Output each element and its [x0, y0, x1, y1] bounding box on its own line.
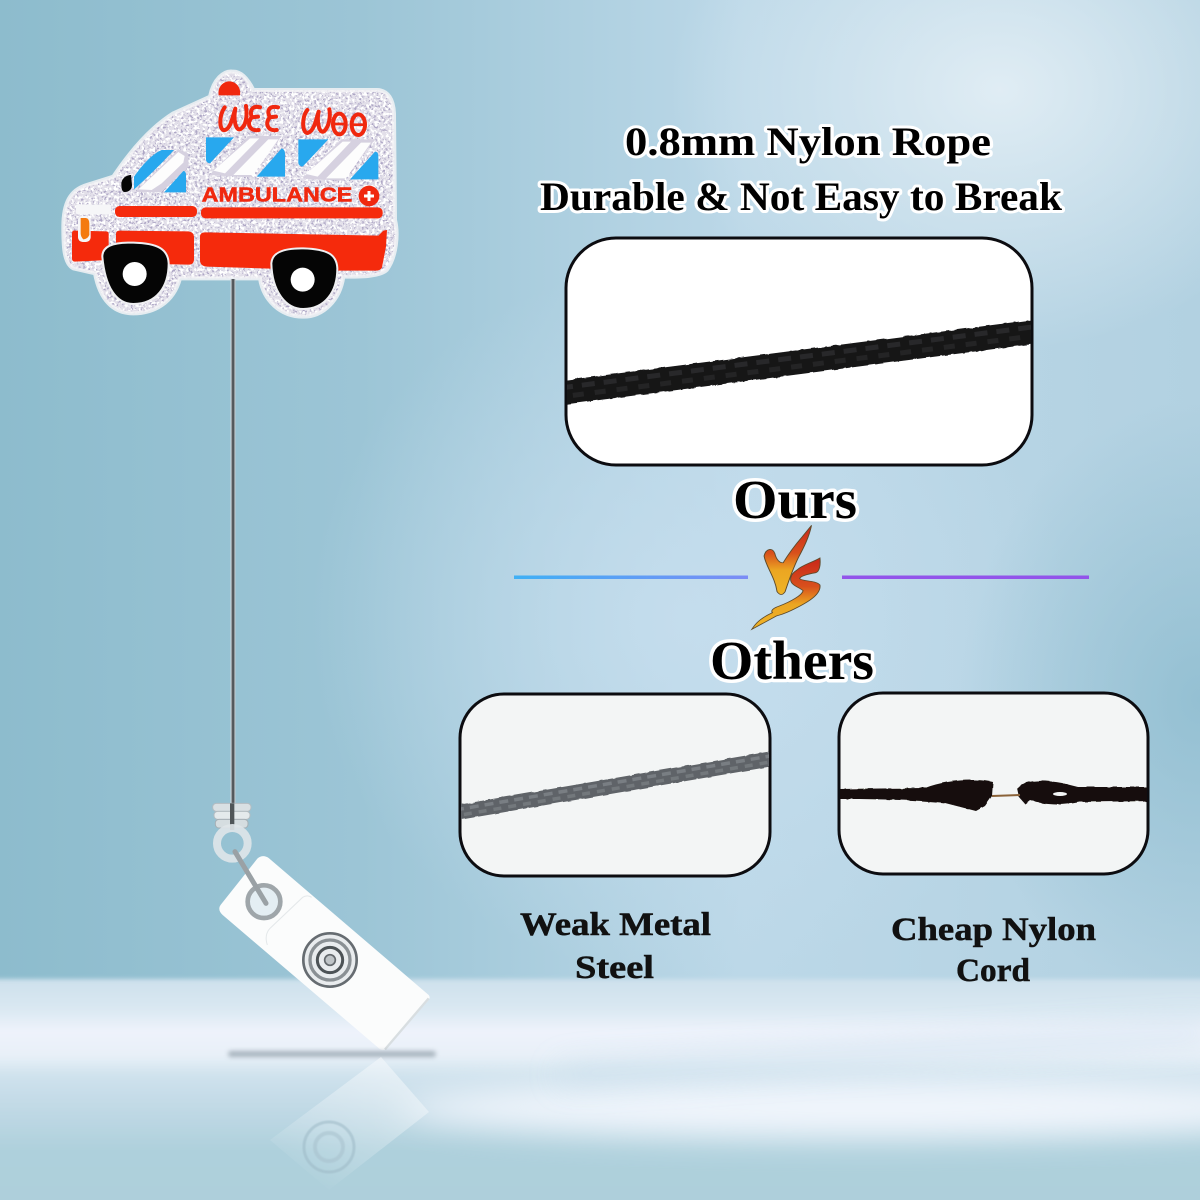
- ours label: Ours: [733, 469, 857, 530]
- panel: our nylon rope: [560, 238, 1040, 465]
- panel: weak metal steel: [455, 694, 776, 876]
- headline: 0.8mm Nylon Rope: [625, 119, 991, 164]
- blue glass: [134, 137, 378, 192]
- panel: cheap nylon cord: [835, 693, 1152, 874]
- white clip: [219, 856, 430, 1050]
- red stripes and body panels: [72, 206, 387, 271]
- headline: Durable & Not Easy to Break: [540, 174, 1063, 219]
- badge clip assembly: [213, 803, 430, 1050]
- caption: weak metal steel: Weak Metal: [520, 907, 711, 943]
- headline: [540, 119, 1063, 219]
- retractable pin: [230, 279, 236, 807]
- caption: weak metal steel: Steel: [575, 950, 654, 986]
- wee woo lettering: [220, 106, 365, 135]
- braided black rope: [560, 326, 1040, 397]
- ground shadow: [228, 1051, 436, 1057]
- threaded bead: [213, 803, 251, 830]
- caption: cheap nylon cord: [891, 912, 1096, 989]
- ambulance badge charm: [60, 68, 400, 318]
- caption: cheap nylon cord: Cord: [956, 953, 1030, 989]
- orange indicator: [78, 216, 91, 242]
- siren light: [218, 81, 240, 95]
- side mirror: [121, 175, 132, 192]
- grey rope: [455, 755, 776, 816]
- vs flame emblem: [752, 525, 820, 629]
- divider right: [842, 576, 1089, 579]
- caption: cheap nylon cord: Cheap Nylon: [891, 912, 1096, 948]
- ambulance label: AMBULANCE: [202, 183, 352, 206]
- clip reflection: [270, 1057, 429, 1190]
- caption: weak metal steel: [520, 907, 711, 986]
- front wheel: [102, 243, 169, 304]
- frayed broken cord: [835, 780, 1152, 811]
- snap button: [303, 933, 357, 987]
- white glass stripes: [138, 138, 371, 190]
- windows: [134, 136, 378, 192]
- others label: Others: [710, 630, 874, 691]
- plastic ring: [217, 828, 248, 859]
- metal link: [235, 852, 266, 903]
- rear wheel: [271, 248, 337, 309]
- plus badge: [359, 186, 379, 206]
- glitter body: [60, 68, 400, 318]
- divider left: [514, 576, 748, 579]
- window stripe backing: [135, 136, 375, 192]
- metal eyelet: [248, 885, 280, 918]
- headlight: [76, 204, 111, 214]
